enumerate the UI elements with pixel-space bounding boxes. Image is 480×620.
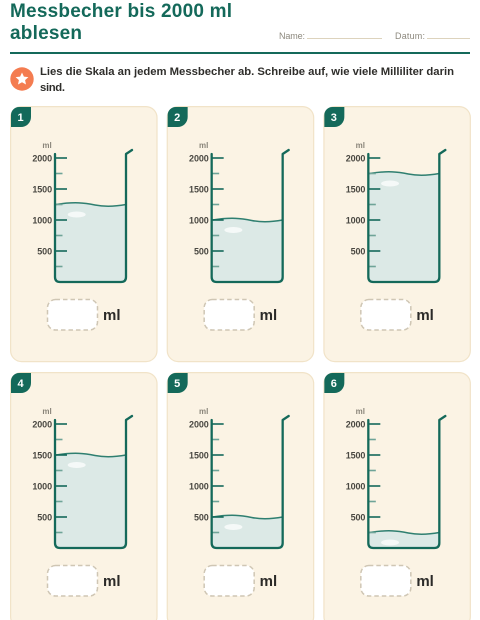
title: ablesen — [10, 23, 82, 44]
scale 5: 1500 — [189, 450, 209, 460]
scale 2: 2000 — [189, 153, 209, 163]
scale 1: 2000 — [32, 153, 52, 163]
scale 2: ml — [199, 141, 208, 150]
scale 4: 1000 — [32, 481, 52, 491]
scale 5: ml — [199, 407, 208, 416]
scale 3: ml — [356, 141, 365, 150]
scale 1 — [32, 141, 67, 266]
scale 4: 2000 — [32, 419, 52, 429]
scale 3: 500 — [351, 246, 365, 256]
scale 2: 1000 — [189, 215, 209, 225]
scale 1: 1500 — [32, 184, 52, 194]
panel: beaker 5 — [167, 373, 314, 620]
scale 4: 1500 — [32, 450, 52, 460]
badge 2: 2 — [174, 112, 180, 124]
scale 4: 500 — [37, 512, 52, 522]
water 1 — [56, 203, 126, 281]
unit 2: ml — [260, 307, 277, 324]
answer box 3 — [361, 300, 411, 330]
answer box 2 — [204, 300, 254, 330]
scale 3: 1500 — [346, 184, 365, 194]
scale 1: ml — [42, 141, 52, 150]
badge 5 — [168, 373, 188, 393]
name and date fields: Name: — [279, 31, 305, 41]
scale 3: 1000 — [346, 215, 365, 225]
badge 1 — [11, 107, 31, 127]
badge 6 — [324, 373, 344, 393]
scale 4: ml — [42, 407, 52, 416]
panel: beaker 3 — [324, 107, 470, 362]
icon: star badge — [10, 67, 34, 91]
beaker outline 4 — [55, 416, 132, 548]
water 3 — [369, 172, 439, 281]
scale 1: 500 — [37, 246, 52, 256]
beaker outline 3 — [368, 150, 445, 282]
scale 2 — [189, 141, 224, 266]
scale 5: 500 — [194, 512, 209, 522]
unit 5: ml — [260, 573, 277, 590]
badge 2 — [168, 107, 188, 127]
scale 6 — [346, 407, 380, 532]
scale 3: 2000 — [346, 153, 365, 163]
name and date fields — [279, 31, 470, 41]
badge 4 — [11, 373, 31, 393]
title — [10, 1, 232, 44]
instructions — [40, 66, 454, 94]
title: Messbecher bis 2000 ml — [10, 1, 232, 22]
answer box 1 — [48, 300, 98, 330]
scale 5: 1000 — [189, 481, 209, 491]
beaker outline 1 — [55, 150, 132, 282]
badge 3: 3 — [331, 112, 337, 124]
beaker outline 6 — [368, 416, 445, 548]
badge 6: 6 — [331, 378, 337, 390]
badge 5: 5 — [174, 378, 180, 390]
water 5 — [213, 515, 283, 547]
unit 4: ml — [103, 573, 121, 590]
scale 6: 1000 — [346, 481, 365, 491]
instructions: sind. — [40, 82, 65, 94]
badge 4: 4 — [17, 378, 24, 390]
instructions: Lies die Skala an jedem Messbecher ab. Schreibe auf, wie viele Milliliter darin — [40, 66, 454, 78]
beaker outline 5 — [212, 416, 289, 548]
scale 2: 500 — [194, 246, 209, 256]
scale 5: 2000 — [189, 419, 209, 429]
scale 4 — [32, 407, 67, 532]
unit 6: ml — [416, 573, 434, 590]
panel: beaker 4 — [11, 373, 157, 620]
scale 6: ml — [356, 407, 365, 416]
scale 2: 1500 — [189, 184, 209, 194]
beaker outline 2 — [212, 150, 289, 282]
unit 3: ml — [416, 307, 434, 324]
water 2 — [213, 218, 283, 281]
badge 1: 1 — [17, 112, 24, 124]
unit 1: ml — [103, 307, 121, 324]
scale 5 — [189, 407, 224, 532]
answer box 6 — [361, 566, 411, 596]
scale 6: 2000 — [346, 419, 365, 429]
scale 3 — [346, 141, 380, 266]
scale 1: 1000 — [32, 215, 52, 225]
panel: beaker 1 — [11, 107, 157, 362]
scale 6: 500 — [351, 512, 365, 522]
badge 3 — [324, 107, 344, 127]
panel: beaker 2 — [167, 107, 314, 362]
name and date fields: Datum: — [395, 31, 425, 41]
scale 6: 1500 — [346, 450, 365, 460]
water 6 — [369, 531, 439, 547]
answer box 4 — [48, 566, 98, 596]
water 4 — [56, 453, 126, 547]
answer box 5 — [204, 566, 254, 596]
panel: beaker 6 — [324, 373, 470, 620]
